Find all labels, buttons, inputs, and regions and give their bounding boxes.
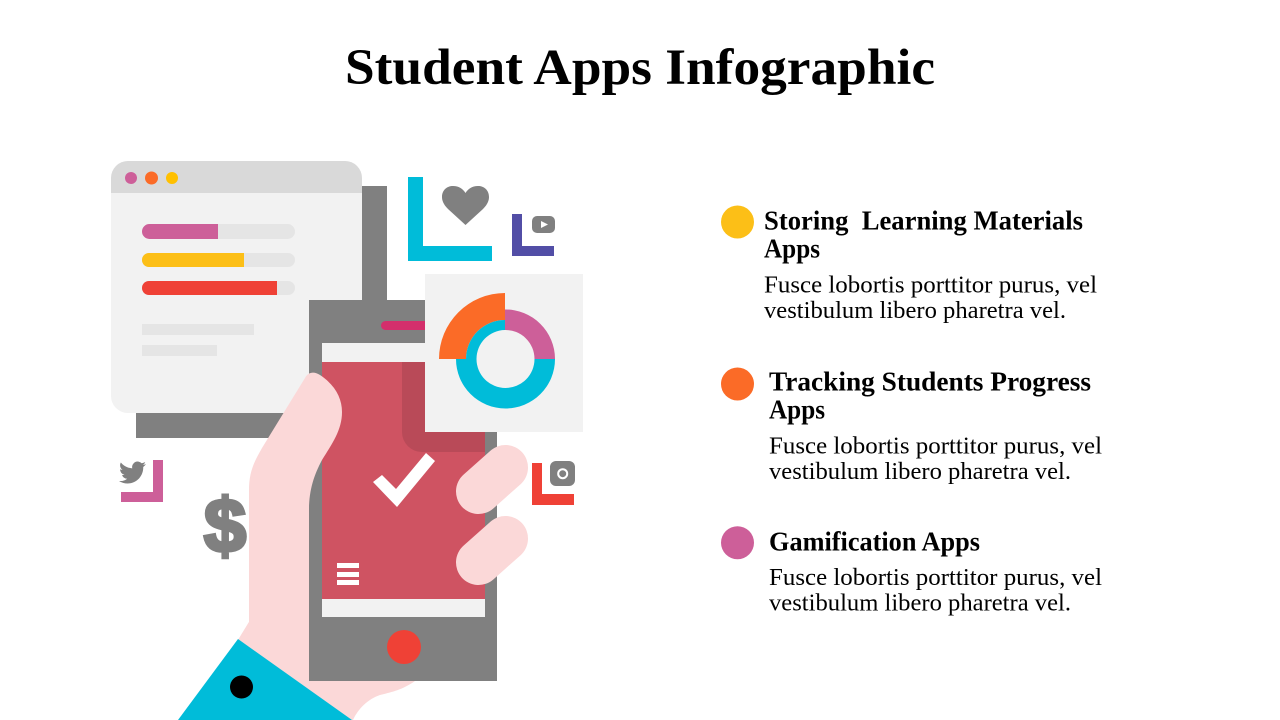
illustration: hand holding phone	[111, 161, 506, 720]
donut chart card	[425, 274, 583, 432]
item: gamification: vestibulum libero pharetra vel.	[769, 590, 1071, 616]
sleeve cuff	[178, 639, 352, 720]
cuff button	[230, 676, 253, 698]
item: storing learning materials: Storing Learning Materials	[764, 206, 1083, 236]
lower hand behind phone	[238, 622, 415, 720]
item: gamification: Fusce lobortis porttitor purus, vel	[769, 564, 1102, 591]
item: tracking students progress	[721, 366, 1102, 485]
browser window	[111, 161, 362, 413]
icon: video with purple bracket	[512, 214, 555, 256]
icon: check mark	[373, 453, 435, 507]
item: tracking students progress: Fusce lobortis porttitor purus, vel	[769, 433, 1102, 460]
icon: photo with red bracket	[532, 461, 575, 505]
finger one	[478, 468, 506, 492]
icon: dollar sign: $	[204, 484, 246, 569]
item: gamification: Gamification Apps	[769, 526, 980, 556]
item: tracking students progress: Tracking Students Progress	[769, 366, 1091, 396]
monitor back shadow	[136, 186, 387, 438]
thumb and palm	[238, 373, 352, 720]
item: gamification	[721, 526, 1102, 616]
item: tracking students progress: vestibulum libero pharetra vel.	[769, 458, 1071, 485]
icon: heart with cyan bracket	[408, 177, 492, 261]
item: tracking students progress: Apps	[769, 395, 825, 425]
item: storing learning materials	[721, 206, 1097, 324]
finger two	[478, 538, 506, 562]
item: storing learning materials: Fusce lobortis porttitor purus, vel	[764, 272, 1097, 299]
item: storing learning materials: Apps	[764, 234, 820, 264]
icon: bird with pink bracket	[119, 460, 163, 502]
title: Student Apps Infographic	[345, 40, 935, 96]
icon: menu	[337, 563, 359, 585]
item: storing learning materials: vestibulum libero pharetra vel.	[764, 297, 1066, 324]
phone	[309, 300, 497, 681]
